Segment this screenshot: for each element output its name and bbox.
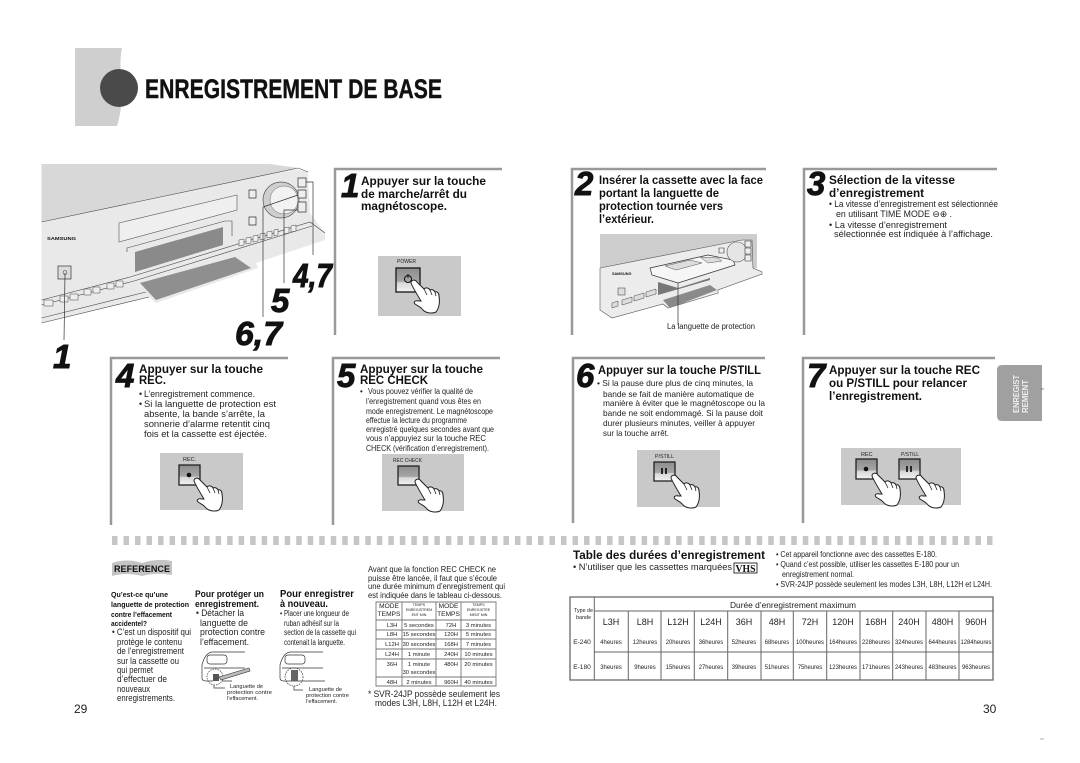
panel: step 6: P/STILL <box>655 454 674 460</box>
panel: step 5: • <box>360 387 363 396</box>
table: maximum recording duration: 9heures <box>634 664 656 671</box>
table: maximum recording duration: 15heures <box>666 664 691 671</box>
table: maximum recording duration: 164heures <box>829 639 858 646</box>
table: minimum recording time: L3H <box>387 623 397 629</box>
illustration: front panel of the recorder <box>42 164 325 340</box>
illustration: tab removal: Languette de <box>230 684 263 690</box>
panel: step 7: 7 <box>807 357 827 394</box>
table: minimum recording time: 960H <box>444 680 458 686</box>
panel: step 6 <box>573 357 765 523</box>
panel: step 5: Appuyer sur la touche <box>360 362 483 376</box>
panel: step 2: La languette de protection <box>667 322 755 331</box>
table: maximum recording duration: 123heures <box>829 664 858 671</box>
panel: step 4: REC. <box>139 373 166 387</box>
panel: step 1: magnétoscope. <box>361 199 447 213</box>
text: what is the protection tab: de l’enregistrement <box>117 646 184 656</box>
table: maximum recording duration: 36heures <box>699 639 724 646</box>
panel: step 5: 5 <box>337 357 356 394</box>
panel: step 1: POWER <box>397 259 416 265</box>
table: minimum recording time: ENT MIN <box>412 613 427 617</box>
text: record again: Pour enregistrer <box>280 589 354 600</box>
text: protect a recording: l’effacement. <box>200 637 249 648</box>
illustration: tab covered with tape: l’effacement. <box>306 699 337 705</box>
panel: step 6: • Si la pause dure plus de cinq minutes, la <box>597 378 753 388</box>
text: what is the protection tab: enregistrements. <box>117 693 175 703</box>
table: minimum recording time: 168H <box>444 642 458 648</box>
table: maximum recording duration: 963heures <box>962 664 991 671</box>
text: what is the protection tab <box>111 590 191 703</box>
panel: step 3 <box>804 165 998 335</box>
table: maximum recording duration: 240H <box>898 617 920 627</box>
table: maximum recording duration: 36H <box>736 617 752 627</box>
table: maximum recording duration: 243heures <box>895 664 924 671</box>
footnote: * SVR-24JP possède seulement les <box>368 689 501 699</box>
table: maximum recording duration: L8H <box>637 617 653 627</box>
notes: cassette compatibility: enregistrement normal. <box>782 570 854 579</box>
text: record again: section de la cassette qui <box>284 628 356 637</box>
text: what is the protection tab: languette de protection <box>111 600 189 609</box>
table: minimum recording time: 240H <box>444 652 458 658</box>
illustration: tab removal: protection contre <box>227 690 272 696</box>
notes: cassette compatibility: • SVR-24JP possède seulement les modes L3H, L8H, L12H et L24H. <box>776 580 992 589</box>
table: minimum recording time: 2 minutes <box>406 680 432 686</box>
table: maximum recording duration: 1284heures <box>960 639 992 646</box>
table: minimum recording time: 48H <box>387 680 397 686</box>
text: what is the protection tab: sur la cassette ou <box>117 656 179 666</box>
table: maximum recording duration: 4heures <box>600 639 622 646</box>
text: protect a recording: protection contre <box>200 627 265 638</box>
table: minimum recording time: 15 secondes <box>403 632 436 638</box>
table: minimum recording time: MODE <box>439 603 459 610</box>
panel: step 4: REC. <box>183 457 197 463</box>
notes: cassette compatibility: • Cet appareil fonctionne avec des cassettes E-180. <box>776 550 937 559</box>
panel: step 7: l’enregistrement. <box>829 389 922 403</box>
panel: step 3: • La vitesse d’enregistrement <box>829 220 948 230</box>
illustration: tab covered with tape <box>280 652 349 705</box>
panel: step 2: l’extérieur. <box>599 212 654 226</box>
footnote <box>368 689 501 708</box>
illustration: front panel of the recorder: SAMSUNG <box>47 236 77 241</box>
panel: step 6: durer plusieurs minutes, veiller à appuyer <box>603 418 755 428</box>
page number 30: 30 <box>983 702 997 716</box>
table: maximum recording duration: 12heures <box>633 639 658 646</box>
panel: step 3: 3 <box>807 165 825 202</box>
table: maximum recording duration <box>570 597 993 680</box>
text: protect a recording: languette de <box>200 618 248 629</box>
table: maximum recording duration: E-180 <box>573 664 591 671</box>
table: maximum recording duration: Type de <box>574 608 593 614</box>
table: minimum recording time: 5 minutes <box>466 632 491 638</box>
panel: step 6: manière à éviter que le magnétoscope ou la <box>603 398 765 408</box>
table: minimum recording time: 3 minutes <box>466 623 491 629</box>
table: minimum recording time: 1 minute <box>408 662 430 668</box>
table: maximum recording duration: L3H <box>603 617 619 627</box>
panel: step 4: 4 <box>115 357 134 394</box>
panel: step 6: Appuyer sur la touche P/STILL <box>598 363 761 377</box>
panel: step 5: REC CHECK <box>360 373 428 387</box>
panel: step 5: CHECK (vérification d’enregistrement). <box>366 444 489 453</box>
callout numbers on the recorder <box>53 257 333 375</box>
panel: step 3: Sélection de la vitesse <box>829 173 955 187</box>
heading: recording duration table: VHS <box>736 564 756 575</box>
panel: step 5: Vous pouvez vérifier la qualité de <box>368 387 473 396</box>
panel: step 3: en utilisant TIME MODE ⊖⊕ . <box>836 209 952 219</box>
table: minimum recording time: ENREGISTRE <box>467 608 491 612</box>
table: minimum recording time: TEMPS <box>413 603 426 607</box>
heading: recording duration table: Table des durées d’enregistrement <box>573 550 765 562</box>
panel: step 5: mode enregistrement. Le magnétoscope <box>366 407 493 416</box>
panel: step 6: bande ne soit endommagé. Si la pause doit <box>603 408 764 418</box>
text: what is the protection tab: nouveaux <box>117 684 151 694</box>
table: minimum recording time: ENREGISTREM <box>406 608 432 612</box>
text: what is the protection tab: contre l’effacement <box>111 610 173 619</box>
panel: step 1: de marche/arrêt du <box>361 187 467 201</box>
callout numbers on the recorder: 5 <box>271 282 290 319</box>
title banner: ENREGISTREMENT DE BASE <box>145 74 442 104</box>
table: minimum recording time: 1 minute <box>408 652 430 658</box>
panel: step 7: P/STILL <box>901 452 919 458</box>
panel: step 7: REC <box>861 452 873 458</box>
panel: step 4: absente, la bande s’arrête, la <box>144 409 265 419</box>
table: maximum recording duration: 100heures <box>796 639 825 646</box>
table: minimum recording time: L24H <box>385 652 399 658</box>
panel: step 2: SAMSUNG <box>612 272 631 276</box>
page number 29: 29 <box>74 702 88 716</box>
panel: step 5: l’enregistrement quand vous êtes en <box>366 397 481 406</box>
heading: recording duration table: • N’utiliser que les cassettes marquées <box>573 562 733 572</box>
text: what is the protection tab: • C’est un dispositif qui <box>112 627 191 637</box>
table: minimum recording time: L8H <box>387 632 397 638</box>
panel: step 1 <box>335 167 502 335</box>
panel: step 2: Insérer la cassette avec la face <box>599 173 763 187</box>
table: minimum recording time: TEMPS <box>378 611 401 618</box>
notes: cassette compatibility: • Quand c’est possible, utiliser les cassettes E-180 pour un <box>776 560 959 569</box>
table: minimum recording time: 10 minutes <box>464 652 493 658</box>
table: maximum recording duration: 644heures <box>928 639 957 646</box>
table: minimum recording time: 40 minutes <box>464 680 493 686</box>
panel: step 5: REC CHECK <box>393 458 422 464</box>
table: maximum recording duration: 168H <box>865 617 887 627</box>
table: maximum recording duration: bande <box>576 615 591 621</box>
side tab: REMENT <box>1021 380 1030 413</box>
panel: step 4: • <box>139 389 142 399</box>
table: maximum recording duration: 72H <box>802 617 818 627</box>
table: minimum recording time: 36H <box>387 662 397 668</box>
table: minimum recording time: TEMPS <box>437 611 460 618</box>
panel: step 2: 2 <box>574 165 594 202</box>
table: minimum recording time: 120H <box>444 632 458 638</box>
text: protect a recording: Pour protéger un <box>195 589 264 599</box>
table: minimum recording time <box>376 602 496 686</box>
text: REC CHECK minimum duration: une durée minimum d’enregistrement qui <box>368 582 505 591</box>
table: maximum recording duration: 324heures <box>895 639 924 646</box>
table: maximum recording duration: 228heures <box>862 639 891 646</box>
table: minimum recording time: MODE <box>379 603 399 610</box>
table: minimum recording time: L12H <box>385 642 399 648</box>
text: record again: • Placer une longueur de <box>280 609 349 618</box>
text: record again: à nouveau. <box>280 599 328 610</box>
panel: step 2: protection tournée vers <box>599 199 723 213</box>
table: maximum recording duration: 27heures <box>699 664 724 671</box>
text: REC CHECK minimum duration: puisse être lancée, il faut que s’écoule <box>368 574 497 583</box>
panel: step 4: Si la languette de protection est <box>144 399 277 409</box>
panel: step 2: portant la languette de <box>599 186 719 200</box>
table: minimum recording time: 30 secondes <box>403 670 436 676</box>
text: what is the protection tab: Qu’est-ce qu’une <box>111 590 168 599</box>
text: record again: contenait la languette. <box>284 638 345 647</box>
illustration: tab removal: l’effacement. <box>227 696 258 702</box>
table: minimum recording time: 20 minutes <box>464 662 493 668</box>
panel: step 7: ou P/STILL pour relancer <box>829 376 967 390</box>
table: maximum recording duration: 3heures <box>600 664 622 671</box>
table: minimum recording time: 72H <box>446 623 456 629</box>
side tab: ENREGIST <box>1012 375 1021 413</box>
table: maximum recording duration: 39heures <box>732 664 757 671</box>
callout numbers on the recorder: 6,7 <box>235 315 284 352</box>
table: maximum recording duration: 171heures <box>862 664 891 671</box>
text: record again: ruban adhésif sur la <box>284 619 340 628</box>
illustration: tab covered with tape: Languette de <box>309 687 342 693</box>
table: maximum recording duration: Durée d’enregistrement maximum <box>730 600 856 610</box>
panel: step 4: Appuyer sur la touche <box>139 362 263 376</box>
reference badge <box>112 560 172 576</box>
table: maximum recording duration: 68heures <box>765 639 790 646</box>
panel: step 5: effectue la lecture du programme <box>366 416 467 425</box>
panel: step 5: vous n’appuyiez sur la touche REC <box>366 434 486 443</box>
table: minimum recording time: TEMPS <box>472 603 485 607</box>
table: maximum recording duration: 52heures <box>732 639 757 646</box>
table: maximum recording duration: E-240 <box>573 639 591 646</box>
text: REC CHECK minimum duration: Avant que la fonction REC CHECK ne <box>368 565 496 574</box>
table: maximum recording duration: 48H <box>769 617 785 627</box>
reference badge: REFERENCE <box>114 564 170 575</box>
notes: cassette compatibility <box>776 550 992 589</box>
text: REC CHECK minimum duration <box>368 565 505 600</box>
text: record again <box>280 589 356 647</box>
text: what is the protection tab: qui permet <box>117 665 153 675</box>
heading: recording duration table <box>573 550 765 575</box>
side tab <box>997 365 1044 421</box>
panel: step 7: Appuyer sur la touche REC <box>829 363 980 377</box>
table: maximum recording duration: 75heures <box>798 664 823 671</box>
text: what is the protection tab: protège le contenu <box>117 637 182 647</box>
table: maximum recording duration: 960H <box>965 617 987 627</box>
panel: step 7 <box>803 357 995 523</box>
panel: step 4: L’enregistrement commence. <box>144 389 255 399</box>
footnote: modes L3H, L8H, L12H et L24H. <box>375 698 497 708</box>
table: maximum recording duration: 483heures <box>928 664 957 671</box>
panel: step 6: sur la touche arrêt. <box>603 428 669 438</box>
panel: step 4: • <box>139 399 142 409</box>
panel: step 5: enregistré quelques secondes avant que <box>366 425 494 434</box>
text: protect a recording: • Détacher la <box>196 608 245 619</box>
table: maximum recording duration: 480H <box>932 617 953 627</box>
table: minimum recording time: MENT MIN <box>470 613 488 617</box>
panel: step 4: sonnerie d’alarme retentit cinq <box>144 419 270 429</box>
text: REC CHECK minimum duration: est indiquée dans le tableau ci-dessous. <box>368 591 502 600</box>
illustration: tab covered with tape: protection contre <box>306 693 349 699</box>
panel: step 1: 1 <box>341 167 359 204</box>
title banner <box>75 48 442 126</box>
callout numbers on the recorder: 1 <box>53 338 71 375</box>
panel: step 6: 6 <box>576 357 595 394</box>
text: protect a recording: enregistrement. <box>195 599 259 609</box>
table: minimum recording time: 7 minutes <box>466 642 491 648</box>
panel: step 4 <box>111 357 288 525</box>
illustration: tab removal <box>202 652 272 702</box>
panel: step 3: d’enregistrement <box>829 186 924 200</box>
table: maximum recording duration: L24H <box>700 617 722 627</box>
table: minimum recording time: 480H <box>444 662 458 668</box>
table: maximum recording duration: 20heures <box>666 639 691 646</box>
table: maximum recording duration: 120H <box>832 617 854 627</box>
text: protect a recording <box>195 589 265 648</box>
text: what is the protection tab: d’effectuer de <box>117 674 167 684</box>
panel: step 6: bande se fait de manière automatique de <box>603 389 754 399</box>
table: maximum recording duration: 51heures <box>765 664 790 671</box>
table: maximum recording duration: L12H <box>667 617 689 627</box>
table: minimum recording time: 30 secondes <box>403 642 436 648</box>
panel: step 3: sélectionnée est indiquée à l’affichage. <box>834 229 993 239</box>
panel: step 5 <box>333 357 500 525</box>
panel: step 1: Appuyer sur la touche <box>361 174 486 188</box>
callout numbers on the recorder: 4,7 <box>292 257 333 294</box>
panel: step 3: • La vitesse d’enregistrement est sélectionnée <box>829 199 998 209</box>
table: minimum recording time: 5 secondes <box>404 623 434 629</box>
text: what is the protection tab: accidentel? <box>111 619 147 628</box>
panel: step 2 <box>572 165 766 335</box>
panel: step 4: fois et la cassette est éjectée. <box>144 429 267 439</box>
